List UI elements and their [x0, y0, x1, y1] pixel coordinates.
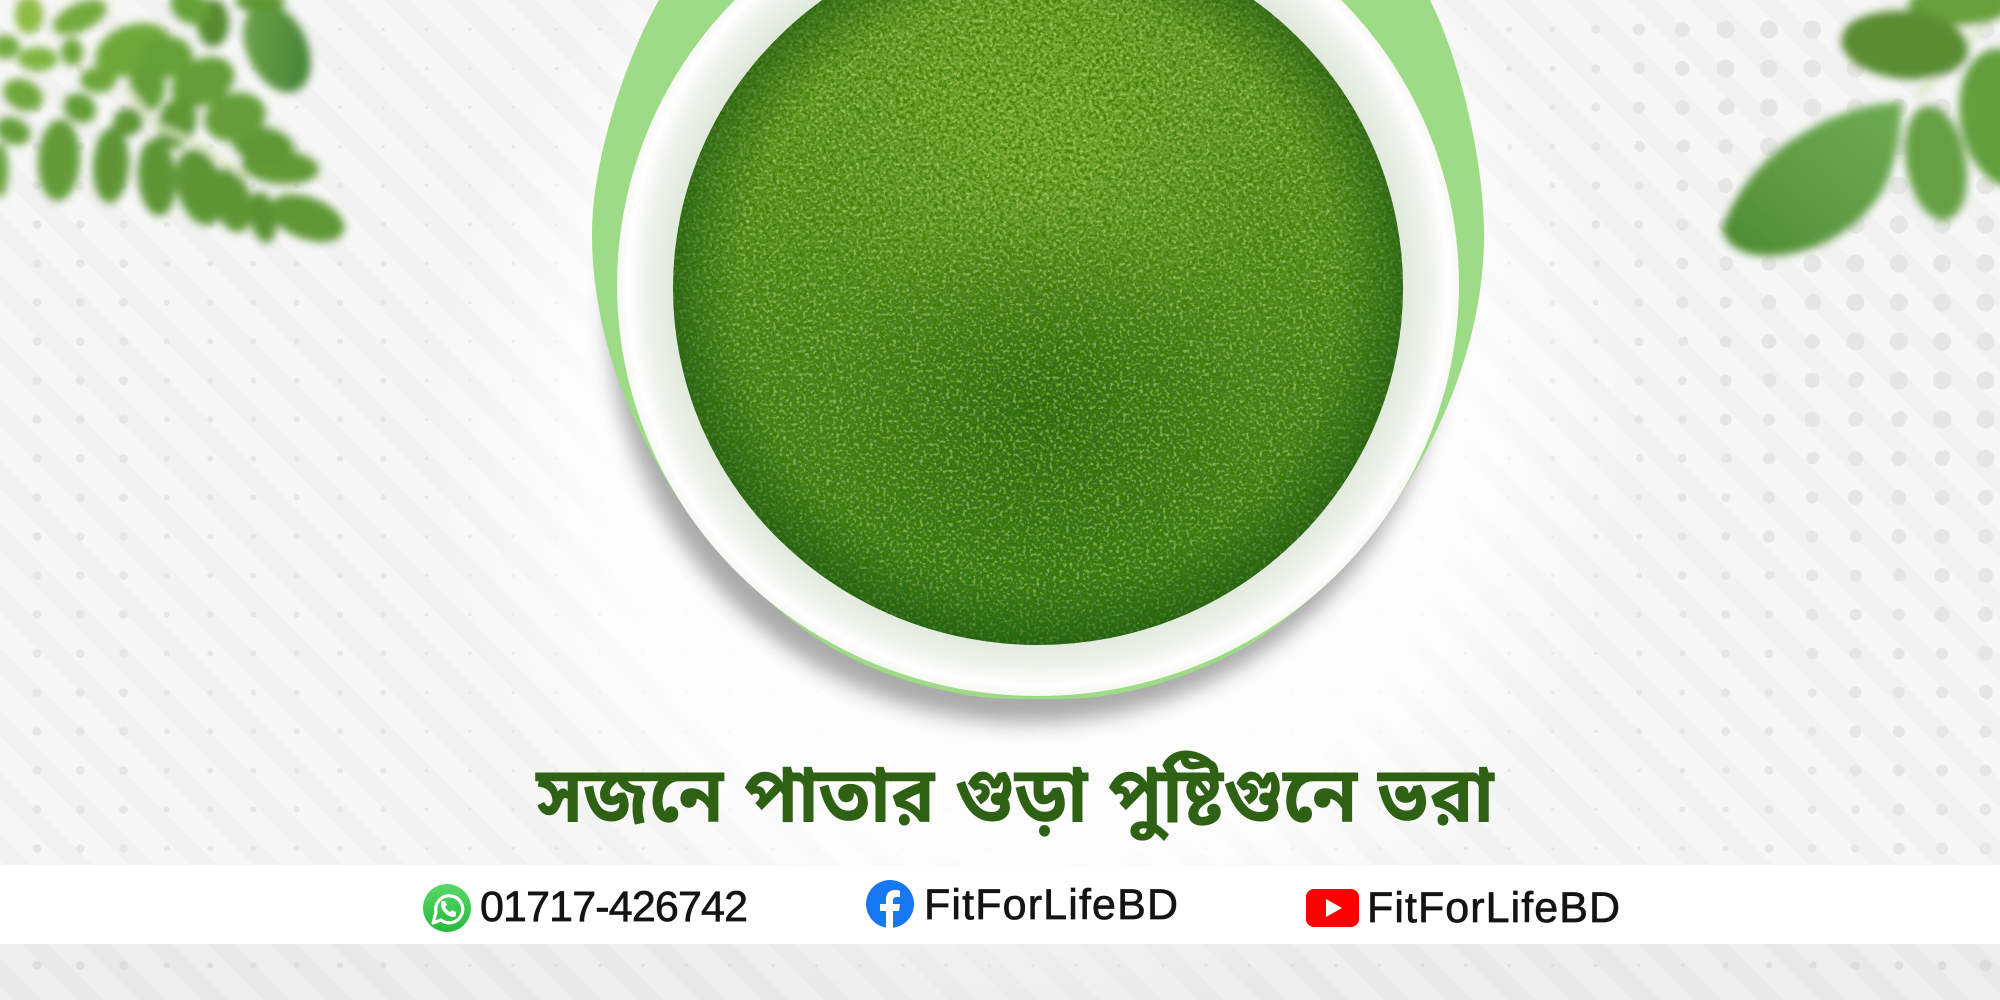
- bowl rim: [617, 0, 1459, 696]
- icon: whatsapp: [423, 884, 471, 932]
- powder texture and shading: [670, 0, 1410, 650]
- icon: blurred moringa leaves top left: [0, 0, 351, 251]
- bowl drop shadow: [608, 0, 1448, 723]
- phone number: 01717-426742: [480, 883, 748, 931]
- powder base colour: [673, 0, 1403, 645]
- white bowl with moringa powder: [617, 0, 1459, 696]
- panel: light green shape behind bowl: [592, 0, 1484, 699]
- icon: youtube: [1306, 889, 1359, 927]
- icon: blurred moringa leaves top right: [1722, 0, 2000, 256]
- title: সজনে পাতার গুড়া পুষ্টিগুনে ভরা: [535, 751, 1495, 841]
- youtube handle: FitForLifeBD: [1367, 884, 1620, 932]
- contact bar: [0, 865, 2000, 944]
- icon: facebook: [866, 880, 914, 928]
- facebook handle: FitForLifeBD: [924, 881, 1178, 929]
